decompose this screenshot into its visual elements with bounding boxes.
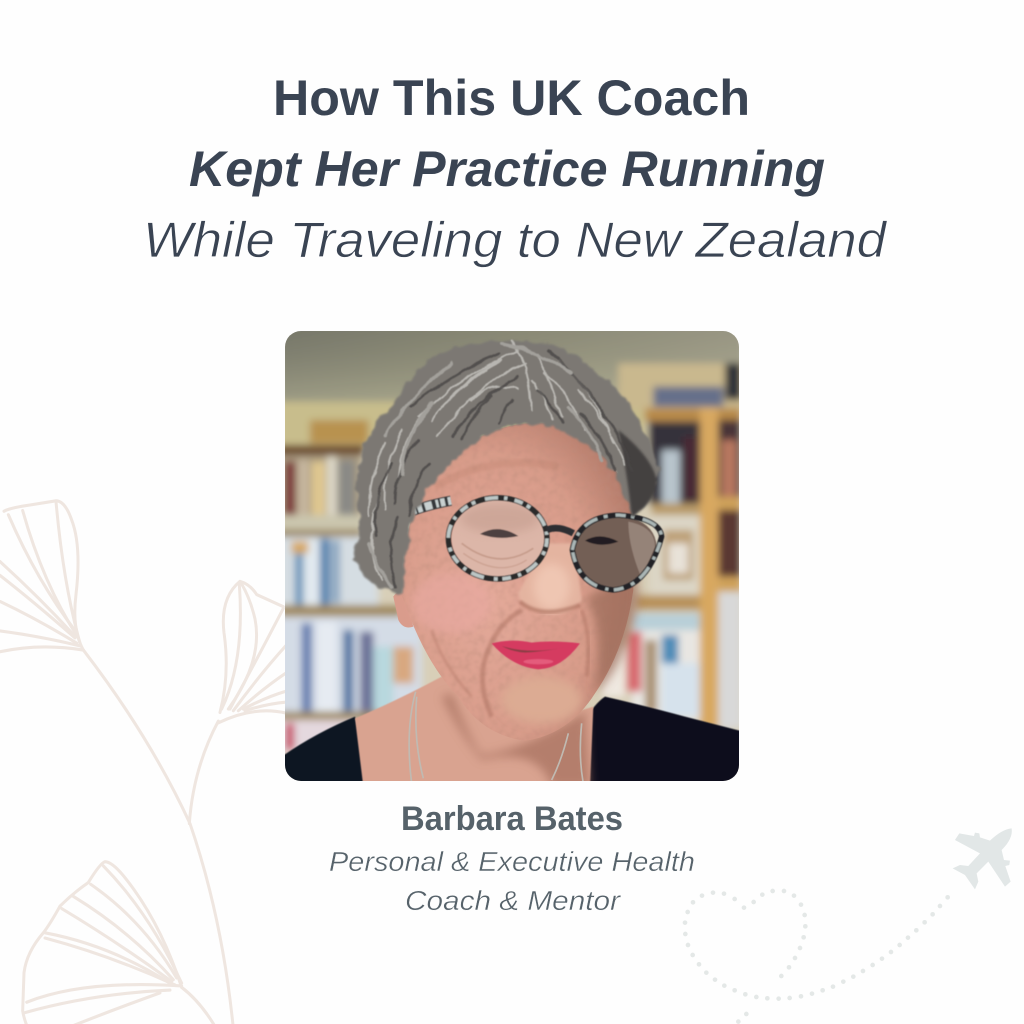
- ginkgo stem: [83, 650, 234, 1024]
- glasses: [413, 498, 662, 590]
- facial shading: [412, 463, 638, 723]
- right eye and lens: [572, 515, 657, 588]
- lower ginkgo leaf: [23, 862, 220, 1024]
- neck shadow: [442, 693, 590, 787]
- title: [143, 70, 888, 268]
- role line 2: Coach & Mentor: [405, 885, 622, 916]
- title line 1: How This UK Coach: [273, 70, 750, 126]
- hair strands: [368, 340, 632, 587]
- middle ginkgo stem and leaf: [189, 581, 287, 824]
- icon: airplane: [953, 828, 1012, 889]
- portrait photo: [278, 323, 745, 790]
- role line 1: Personal & Executive Health: [329, 846, 695, 877]
- left eye and lens: [452, 499, 545, 578]
- blurred bookshelf background: [278, 323, 745, 790]
- necklace: [409, 692, 583, 783]
- face: [402, 423, 633, 741]
- title line 2: Kept Her Practice Running: [189, 141, 825, 197]
- title line 3: While Traveling to New Zealand: [143, 212, 888, 268]
- upper ginkgo leaf: [0, 501, 83, 652]
- lips: [492, 641, 580, 669]
- decoration: ginkgo leaves: [0, 501, 287, 1024]
- decoration: dotted heart flight path: [683, 889, 950, 1024]
- ear: [393, 592, 413, 627]
- name: Barbara Bates: [401, 800, 623, 838]
- black top: [282, 697, 743, 787]
- nose: [518, 543, 582, 614]
- neck and chest: [355, 677, 593, 787]
- hair: [353, 340, 658, 595]
